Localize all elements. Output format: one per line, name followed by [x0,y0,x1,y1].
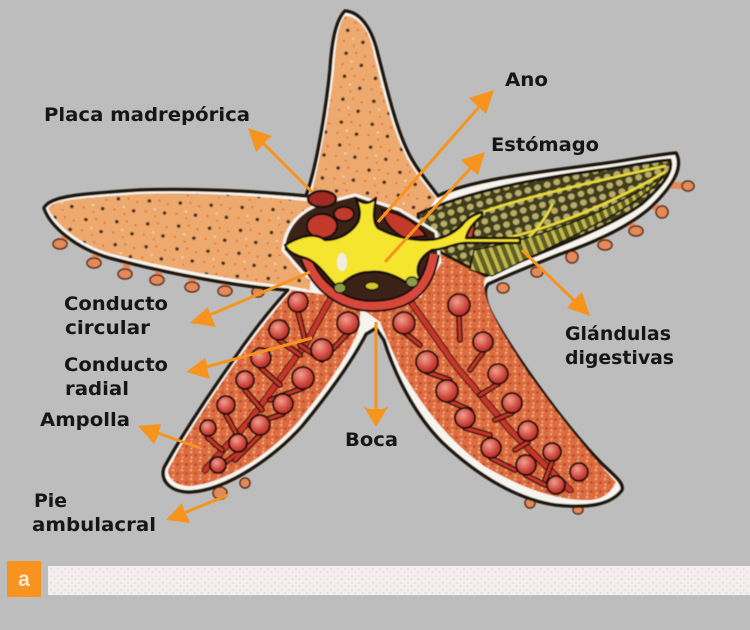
red organs above stomach [307,207,426,238]
lower right arm [350,240,616,500]
label: Conducto radial [64,354,168,400]
stomach highlight [337,253,347,271]
footer logo [7,561,41,597]
label: Conducto radial: radial [65,378,129,400]
label: Placa madrepórica: Placa madrepórica [44,104,250,126]
label: Conducto circular [64,293,168,339]
label: Boca: Boca [345,429,398,451]
ampullae: left arm [200,292,359,473]
lower left arm [168,290,362,486]
label: Ampolla: Ampolla [40,409,130,431]
madreporic plate [308,191,336,207]
illustration: starfish anatomy [44,11,694,514]
arrow: Conducto circular [190,272,310,327]
ring canal [306,254,434,306]
label: Conducto circular: circular [65,317,151,339]
label: Estómago: Estómago [491,134,599,156]
left arm skin [48,193,312,290]
label: Pie ambulacral [32,490,156,536]
arrow: Conducto radial [186,338,312,379]
label: Conducto circular: Conducto [64,293,168,315]
footer logo: a [18,568,30,591]
stomach [285,198,520,288]
label: Pie ambulacral: ambulacral [32,514,156,536]
footer bar [48,566,750,595]
arrow: Glándulas digestivas [522,250,590,316]
right arm: digestive glands [418,160,671,276]
arrow: Ano [378,90,494,222]
body outline [44,11,679,506]
arrow: Estómago [385,152,485,262]
tube feet along the arms [53,181,694,514]
mouth ring [334,277,418,293]
label: Glándulas digestivas [565,323,674,369]
ampullae: right arm [393,294,588,494]
label: Glándulas digestivas: digestivas [565,347,674,369]
label: Pie ambulacral: Pie [34,490,67,512]
arrow: Ampolla [138,424,200,448]
label: Glándulas digestivas: Glándulas [565,323,671,345]
arrow: Pie ambulacral [166,495,228,523]
top arm: speckled skin [305,16,436,225]
radial canals [205,296,570,490]
arrow: Boca [364,322,388,427]
central disc [283,195,440,308]
label: Ano: Ano [505,69,548,91]
label: Conducto radial: Conducto [64,354,168,376]
arrow: Placa madrepórica [248,128,312,192]
